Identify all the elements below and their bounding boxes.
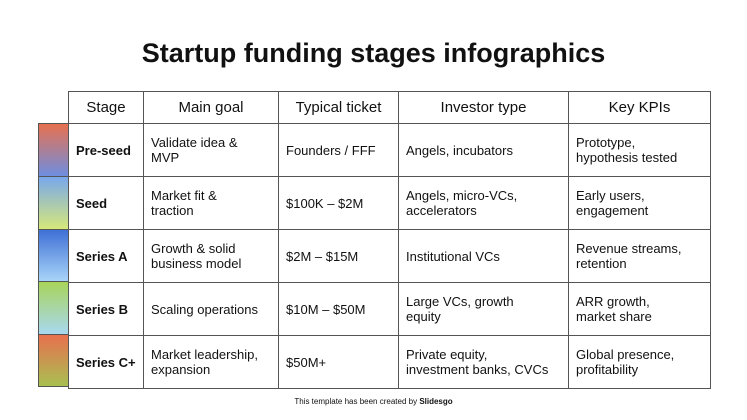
table: hypothesis tested xyxy=(576,150,677,165)
table: Early users, xyxy=(576,188,645,203)
table: equity xyxy=(406,309,441,324)
table: Series B xyxy=(76,302,128,316)
table: Angels, incubators xyxy=(406,142,513,158)
table: Typical ticket xyxy=(296,99,381,116)
table: retention xyxy=(576,256,627,271)
table: Stage xyxy=(86,99,126,116)
table: traction xyxy=(151,203,194,218)
table: ARR growth, xyxy=(576,294,650,309)
table: Market fit & xyxy=(151,188,217,203)
color bar: series B xyxy=(38,281,68,335)
color bar: seed xyxy=(38,176,68,230)
table: Revenue streams, xyxy=(576,241,682,256)
table: Private equity, xyxy=(406,347,487,362)
table: Institutional VCs xyxy=(406,248,500,264)
table: Series C+ xyxy=(76,354,136,370)
table: Large VCs, growth xyxy=(406,294,514,309)
color bar: pre-seed xyxy=(38,123,68,177)
table: Prototype, xyxy=(576,135,635,150)
table: investment banks, CVCs xyxy=(406,362,548,377)
table: Global presence, xyxy=(576,347,674,362)
color bar: series A xyxy=(38,229,68,282)
table: market share xyxy=(576,309,652,324)
color bar: series C xyxy=(38,334,68,387)
title: Startup funding stages infographics xyxy=(142,38,605,68)
table: Key KPIs xyxy=(609,99,670,116)
table: expansion xyxy=(151,362,210,377)
table: Validate idea & xyxy=(151,135,238,150)
table: Series A xyxy=(76,248,128,264)
table: MVP xyxy=(151,150,179,165)
table xyxy=(68,91,711,389)
table: Pre-seed xyxy=(76,142,131,158)
table: $10M – $50M xyxy=(286,302,366,316)
table: Investor type xyxy=(441,99,526,116)
table: $50M+ xyxy=(286,354,326,370)
table: Main goal xyxy=(178,99,244,116)
table: $2M – $15M xyxy=(286,248,358,264)
table: $100K – $2M xyxy=(286,196,363,210)
table: Founders / FFF xyxy=(286,142,376,158)
table: accelerators xyxy=(406,203,477,218)
table: Seed xyxy=(76,196,107,210)
table: business model xyxy=(151,256,241,271)
table: Angels, micro-VCs, xyxy=(406,188,517,203)
table: Market leadership, xyxy=(151,347,258,362)
table: profitability xyxy=(576,362,638,377)
footer: This template has been created by Slidesgo xyxy=(294,397,453,406)
table: engagement xyxy=(576,203,648,218)
table: Growth & solid xyxy=(151,241,236,256)
table: Scaling operations xyxy=(151,302,258,316)
